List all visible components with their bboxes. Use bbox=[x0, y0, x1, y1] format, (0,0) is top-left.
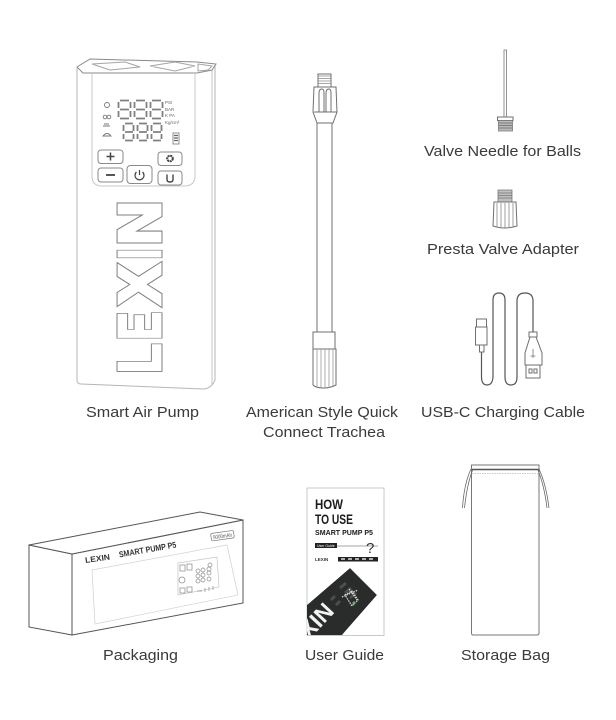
mode icons bbox=[103, 102, 111, 136]
pump logo: L bbox=[107, 344, 173, 373]
booklet title: SMART PUMP P5 bbox=[315, 528, 373, 537]
label: user guide: User Guide bbox=[305, 647, 384, 664]
label: american style quick connect trachea: Connect Trachea bbox=[263, 424, 386, 441]
booklet device photo: XIN bbox=[294, 598, 339, 643]
illustration: usb-c cable bbox=[476, 293, 542, 385]
button: minus bbox=[98, 168, 123, 182]
illustration: user guide booklet bbox=[306, 488, 384, 636]
booklet title: HOW bbox=[315, 496, 344, 512]
pump logo bbox=[107, 201, 173, 373]
label: american style quick connect trachea bbox=[246, 404, 399, 441]
booklet device photo bbox=[307, 568, 377, 635]
label: american style quick connect trachea: American Style Quick bbox=[246, 404, 399, 421]
label: valve needle for balls: Valve Needle for Balls bbox=[424, 143, 581, 160]
unit labels bbox=[165, 100, 180, 125]
label: packaging: Packaging bbox=[103, 647, 178, 664]
illustration: valve needle bbox=[498, 50, 513, 131]
booklet title: TO USE bbox=[315, 511, 353, 527]
display digits bbox=[118, 100, 162, 140]
pump logo: X bbox=[107, 264, 173, 304]
booklet tag line bbox=[315, 540, 378, 557]
pump logo: X bbox=[107, 264, 173, 304]
label: presta valve adapter: Presta Valve Adapter bbox=[427, 241, 579, 258]
label: usb-c charging cable: USB-C Charging Cable bbox=[421, 404, 585, 421]
pump logo: I bbox=[107, 249, 173, 259]
box capacity badge: 5000mAh bbox=[213, 533, 232, 541]
box control panel bbox=[178, 557, 219, 595]
pump logo: I bbox=[107, 249, 173, 259]
box product name: SMART PUMP P5 bbox=[118, 540, 177, 559]
unit labels: Kg/cm² bbox=[165, 120, 180, 125]
pump logo: L bbox=[107, 344, 173, 373]
illustration: presta valve adapter bbox=[493, 190, 517, 228]
booklet brand row bbox=[315, 557, 378, 562]
illustration: storage bag bbox=[462, 465, 549, 635]
unit labels: K PA bbox=[165, 113, 175, 118]
label: smart air pump: Smart Air Pump bbox=[86, 404, 199, 421]
pump logo: E bbox=[107, 312, 173, 340]
button: U bbox=[158, 171, 182, 185]
pump logo: N bbox=[107, 201, 173, 245]
pump logo: E bbox=[107, 312, 173, 340]
illustration: packaging box bbox=[29, 512, 243, 635]
booklet brand row: LEXIN bbox=[315, 557, 328, 562]
button: plus bbox=[98, 150, 123, 164]
button: settings bbox=[158, 152, 182, 166]
label: storage bag: Storage Bag bbox=[461, 647, 550, 664]
illustration: smart air pump bbox=[77, 59, 216, 389]
booklet title bbox=[315, 496, 373, 537]
box logo: LEXIN bbox=[85, 553, 111, 565]
infographic canvas bbox=[28, 50, 584, 663]
illustration: quick connect hose bbox=[313, 74, 337, 388]
unit labels: BAR bbox=[165, 107, 175, 112]
pump logo: N bbox=[107, 201, 173, 245]
unit labels: PSI bbox=[165, 100, 172, 105]
booklet tag line: User Guide bbox=[317, 544, 335, 548]
box capacity badge bbox=[211, 530, 234, 541]
booklet tag line: ? bbox=[366, 540, 374, 557]
battery icon bbox=[173, 133, 179, 144]
button: power bbox=[127, 166, 152, 184]
